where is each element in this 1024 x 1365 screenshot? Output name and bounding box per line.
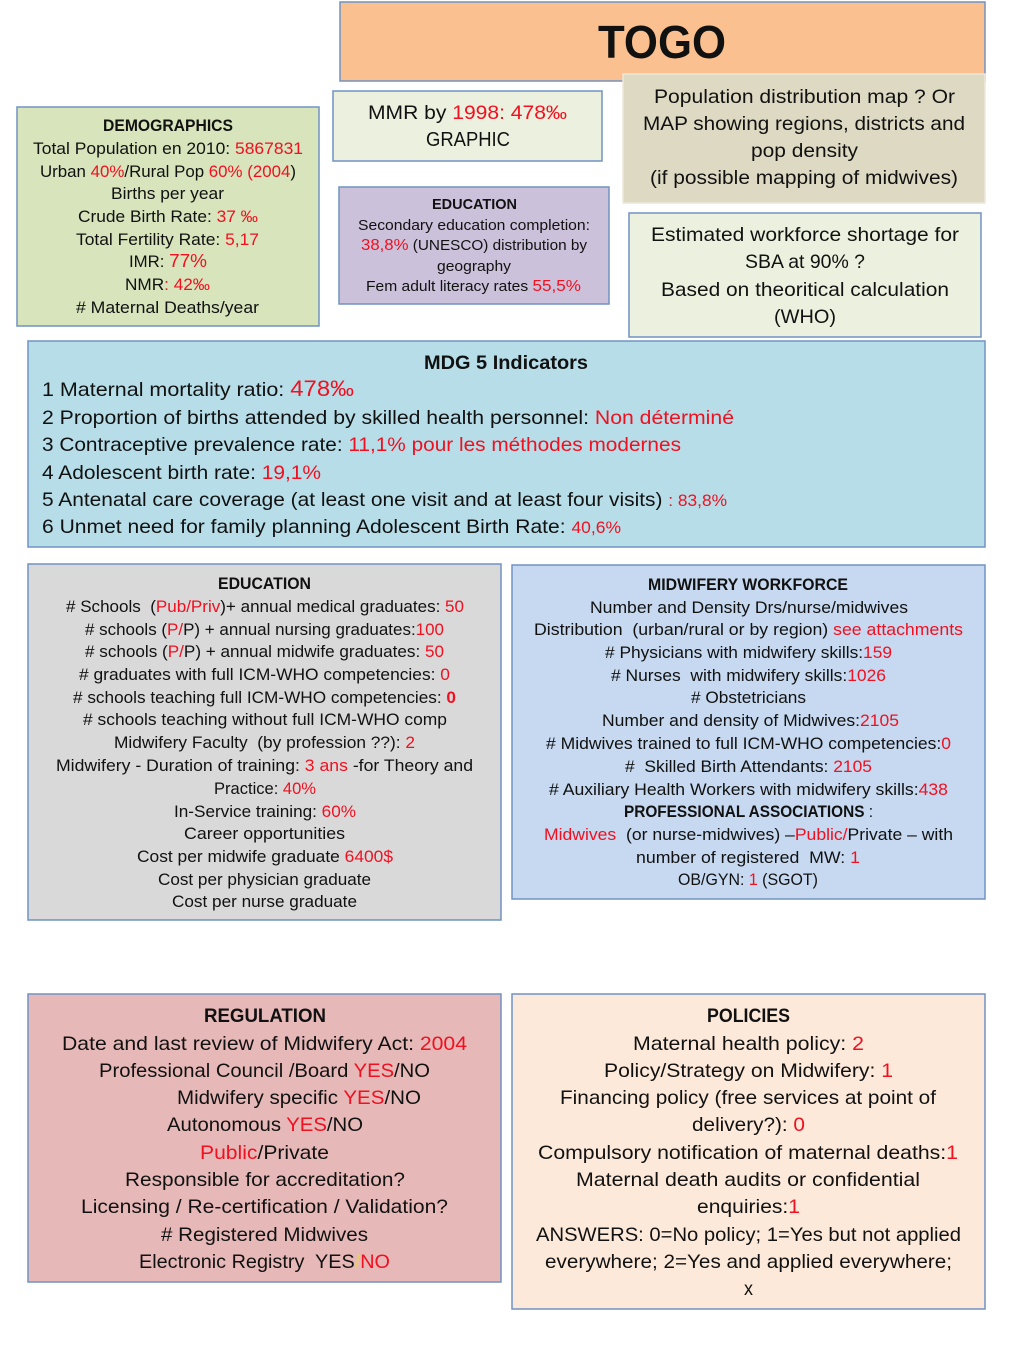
- education text lines: # schools teaching full ICM-WHO competencies: 0: [73, 689, 456, 707]
- regulation text lines: Autonomous YES/NO: [167, 1114, 363, 1136]
- regulation text lines: Licensing / Re-certification / Validation?: [81, 1196, 448, 1218]
- panel: regulation: [28, 994, 501, 1282]
- midwifery workforce text lines: Number and density of Midwives: 2105: [602, 712, 899, 730]
- policies text lines: everywhere; 2=Yes and applied everywhere;: [545, 1251, 952, 1273]
- panel: midwifery workforce: [512, 565, 985, 899]
- heading: education: EDUCATION: [218, 575, 311, 593]
- policies text lines: Financing policy (free services at point of: [560, 1087, 937, 1109]
- education secondary text: 38,8% (UNESCO) distribution by: [361, 237, 588, 254]
- demographics text lines: IMR: 77%: [129, 250, 207, 271]
- map placeholder text: MAP showing regions, districts and: [643, 113, 965, 135]
- demographics text lines: Crude Birth Rate: 37 ‰: [78, 208, 258, 226]
- education text lines: Cost per physician graduate: [158, 871, 371, 889]
- policies text lines: Maternal health policy: 2: [633, 1033, 864, 1055]
- regulation text lines: Electronic Registry YES/NO: [139, 1251, 390, 1273]
- demographics text lines: NMR: 42‰: [125, 276, 210, 294]
- workforce shortage text: SBA at 90% ?: [745, 251, 865, 273]
- workforce shortage text: Based on theoritical calculation: [661, 279, 949, 301]
- MDG indicators list: 3 Contraceptive prevalence rate: 11,1% pour les méthodes modernes: [42, 434, 681, 456]
- title banner: [340, 2, 985, 81]
- heading: policies: POLICIES: [707, 1005, 790, 1027]
- education text lines: Midwifery Faculty (by profession ??): 2: [114, 734, 415, 752]
- education secondary text: geography: [437, 259, 512, 275]
- MDG indicators list: 1 Maternal mortality ratio: 478‰: [42, 376, 354, 401]
- regulation text lines: Responsible for accreditation?: [125, 1169, 405, 1191]
- education text lines: # schools (P/P) + annual nursing graduates: 100: [85, 621, 444, 639]
- education text lines: # schools (P/P) + annual midwife graduates: 50: [85, 643, 444, 661]
- education text lines: Midwifery - Duration of training: 3 ans -for Theory and: [56, 757, 473, 775]
- map placeholder text: (if possible mapping of midwives): [650, 167, 958, 189]
- midwifery workforce text lines: Number and Density Drs/nurse/midwives: [590, 599, 908, 617]
- education secondary text: Fem adult literacy rates 55,5%: [366, 278, 581, 295]
- panel: policies: [512, 994, 985, 1309]
- education text lines: # Schools (Pub/Priv)+ annual medical graduates: 50: [66, 598, 464, 616]
- education text lines: Cost per midwife graduate 6400$: [137, 848, 393, 866]
- regulation text lines: # Registered Midwives: [161, 1224, 368, 1246]
- policies text lines: Policy/Strategy on Midwifery: 1: [604, 1060, 893, 1082]
- panel: MDG 5 indicators: [28, 341, 985, 547]
- policies text lines: enquiries: 1: [697, 1196, 800, 1218]
- education text lines: In-Service training: 60%: [174, 803, 356, 821]
- panel: workforce shortage: [629, 213, 981, 337]
- regulation text lines: Professional Council /Board YES/NO: [99, 1060, 430, 1082]
- education secondary text: Secondary education completion:: [358, 218, 590, 234]
- workforce shortage text: [651, 224, 959, 328]
- demographics text lines: Urban 40%/Rural Pop 60% (2004): [40, 163, 296, 181]
- MMR text: GRAPHIC: [426, 128, 510, 151]
- midwifery workforce text lines: Distribution (urban/rural or by region) see attachments: [534, 621, 963, 639]
- midwifery workforce text lines: # Nurses with midwifery skills: 1026: [611, 667, 886, 685]
- regulation text lines: Public/Private: [200, 1142, 329, 1164]
- workforce shortage text: Estimated workforce shortage for: [651, 224, 959, 246]
- heading: midwifery workforce: MIDWIFERY WORKFORCE: [648, 576, 848, 594]
- education text lines: Career opportunities: [184, 825, 345, 843]
- midwifery workforce text lines: # Obstetricians: [691, 689, 806, 707]
- policies text lines: [536, 1033, 961, 1300]
- regulation text lines: Midwifery specific YES/NO: [177, 1087, 421, 1109]
- workforce shortage text: (WHO): [774, 306, 836, 328]
- demographics text lines: Total Fertility Rate: 5,17: [76, 231, 259, 249]
- MDG indicators list: 2 Proportion of births attended by skilled health personnel: Non déterminé: [42, 407, 734, 429]
- map placeholder text: pop density: [751, 140, 858, 162]
- MDG indicators list: 6 Unmet need for family planning Adolescent Birth Rate: 40,6%: [42, 516, 621, 538]
- regulation text lines: [62, 1033, 467, 1273]
- education text lines: Practice: 40%: [214, 780, 316, 798]
- heading: regulation: REGULATION: [204, 1005, 326, 1027]
- panel: education secondary: [339, 187, 609, 304]
- midwifery workforce text lines: [534, 599, 963, 889]
- heading: demographics: DEMOGRAPHICS: [103, 117, 233, 135]
- policies text lines: delivery?): 0: [692, 1114, 805, 1136]
- policies text lines: ANSWERS: 0=No policy; 1=Yes but not applied: [536, 1224, 961, 1246]
- midwifery workforce text lines: # Physicians with midwifery skills: 159: [605, 644, 892, 662]
- demographics text lines: # Maternal Deaths/year: [76, 299, 260, 317]
- midwifery workforce text lines: OB/GYN: 1 (SGOT): [678, 871, 818, 889]
- heading: education secondary: EDUCATION: [432, 197, 517, 213]
- regulation text lines: Date and last review of Midwifery Act: 2004: [62, 1033, 467, 1055]
- MDG indicators list: 5 Antenatal care coverage (at least one visit and at least four visits) : 83,8%: [42, 489, 727, 511]
- MDG indicators list: 4 Adolescent birth rate: 19,1%: [42, 462, 321, 484]
- midwifery workforce text lines: # Skilled Birth Attendants: 2105: [625, 758, 872, 776]
- MDG indicators list: [42, 376, 734, 538]
- demographics text lines: Total Population en 2010: 5867831: [33, 140, 303, 158]
- policies text lines: Maternal death audits or confidential: [576, 1169, 920, 1191]
- education text lines: # schools teaching without full ICM-WHO comp: [83, 711, 447, 729]
- midwifery workforce text lines: Midwives (or nurse-midwives) – Public/Private – with: [544, 826, 953, 844]
- map placeholder text: [643, 86, 965, 189]
- midwifery workforce text lines: # Auxiliary Health Workers with midwifery skills: 438: [549, 781, 948, 799]
- heading: MDG 5 indicators: MDG 5 Indicators: [424, 352, 588, 374]
- panel: demographics: [17, 107, 319, 326]
- midwifery workforce text lines: PROFESSIONAL ASSOCIATIONS :: [624, 803, 873, 821]
- policies text lines: x: [744, 1278, 753, 1300]
- midwifery workforce text lines: # Midwives trained to full ICM-WHO competencies: 0: [546, 735, 951, 753]
- education text lines: [56, 598, 473, 911]
- demographics text lines: Births per year: [111, 185, 225, 203]
- title text: TOGO: [598, 16, 726, 68]
- education secondary text: [358, 218, 590, 295]
- panel: education: [28, 564, 501, 920]
- education text lines: # graduates with full ICM-WHO competencies: 0: [79, 666, 450, 684]
- panel: population map placeholder: [623, 74, 985, 203]
- midwifery workforce text lines: number of registered MW: 1: [636, 849, 860, 867]
- panel: MMR graphic: [333, 91, 602, 161]
- MMR text: [368, 102, 567, 151]
- demographics text lines: [33, 140, 303, 317]
- policies text lines: Compulsory notification of maternal deaths: 1: [538, 1142, 958, 1164]
- education text lines: Cost per nurse graduate: [172, 893, 357, 911]
- MMR text: MMR by 1998: 478‰: [368, 102, 567, 124]
- map placeholder text: Population distribution map ? Or: [654, 86, 955, 108]
